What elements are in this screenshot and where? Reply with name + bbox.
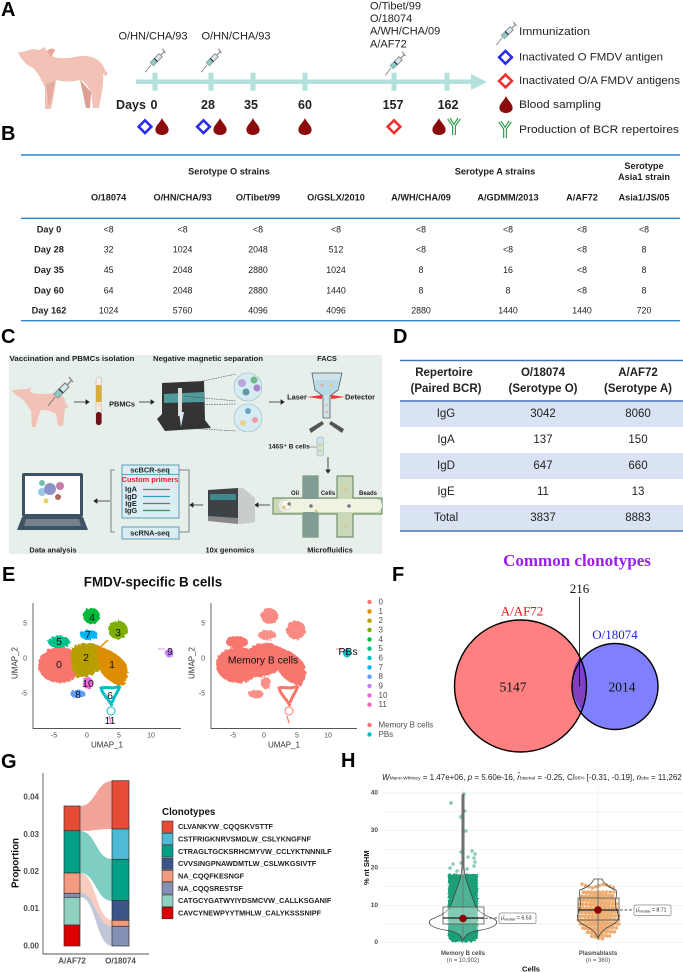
row: Day 162: 720	[637, 306, 651, 316]
right axes: 0	[262, 732, 266, 740]
y axis labels: 10	[371, 902, 378, 909]
x axis labels	[441, 951, 618, 972]
median label: plasmablasts: median	[639, 909, 651, 913]
clonotype legend: NA_CQQFKESNGF	[178, 872, 245, 880]
row: Day 35	[34, 265, 647, 275]
statistics heading: W	[382, 772, 391, 782]
cluster labels: 6	[107, 690, 113, 702]
y axis labels: 30	[371, 827, 378, 834]
cluster labels: 8	[75, 689, 81, 701]
sorted B cell tube: 146S⁺ B cells	[268, 444, 310, 450]
panel letter F: F	[392, 564, 404, 586]
table D header: (Paired BCR)	[411, 383, 482, 395]
row: Day 35: <8	[577, 265, 587, 275]
table header: Asia1 strain	[618, 172, 670, 182]
statistics heading: obs	[641, 775, 649, 781]
legend: clusters: 5	[378, 644, 384, 653]
left axes: 5	[117, 732, 121, 740]
left axes: -5	[21, 690, 27, 698]
statistics heading: [-0.31, -0.19],	[585, 772, 637, 782]
right axes: UMAP_2	[188, 646, 196, 679]
title: FMDV-specific B cells	[84, 574, 222, 590]
axes: 0.00	[23, 942, 40, 950]
panel C: workflow diagram	[1, 326, 382, 554]
row: Day 35: 2048	[173, 265, 192, 275]
table header: A/WH/CHA/09	[391, 193, 451, 203]
y axis labels: 0	[374, 939, 378, 946]
panel letter G: G	[1, 751, 17, 773]
row: Day 28: 512	[329, 244, 343, 254]
workflow background	[9, 355, 382, 554]
table D header: (Serotype O)	[508, 383, 578, 395]
median label: memory B cells: = 6.53	[515, 915, 532, 921]
right axes: 10	[324, 732, 332, 740]
panel F: Venn diagram	[392, 551, 658, 752]
stacked bar O/18074	[112, 781, 129, 946]
FACS sorter: Laser	[287, 392, 307, 402]
legend: clusters: 0	[378, 598, 384, 606]
legend: clusters: 8	[378, 672, 384, 681]
table D rows: IgA	[437, 434, 455, 446]
right axes: UMAP_1	[268, 740, 301, 750]
row: Day 60: 2048	[173, 285, 192, 295]
row: Day 0: <8	[639, 224, 649, 234]
scBCR-seq box: IgE	[125, 499, 137, 508]
row: Day 60: 64	[104, 285, 114, 295]
table D header: A/AF72	[618, 367, 658, 379]
row: Day 162: 4096	[326, 306, 346, 316]
axes: 0.04	[23, 792, 40, 802]
axes: A/AF72	[58, 956, 86, 966]
row: Day 28	[34, 244, 647, 254]
statistics heading: = 1.47e+06,	[420, 772, 468, 782]
row: Day 0: <8	[416, 224, 426, 234]
median label: plasmablasts: = 8.71	[650, 907, 667, 913]
x axis labels: (n = 360)	[586, 958, 610, 964]
row: Day 60: 8	[506, 285, 511, 295]
legend: cell types	[367, 720, 433, 739]
Venn labels: 216	[570, 581, 590, 596]
x axis labels: Memory B cells	[441, 951, 486, 957]
scBCR-seq box: IgG	[125, 506, 137, 515]
row: Day 162: 4096	[248, 306, 268, 316]
jitter: memory B cells	[448, 792, 478, 942]
row: Day 162	[32, 306, 651, 316]
row: Day 0: Day 0	[37, 224, 61, 234]
legend: clusters: 6	[378, 654, 384, 662]
clonotype legend: Clonotypes	[162, 807, 216, 818]
table header: Asia1/JS/05	[618, 193, 670, 203]
row: Day 35: 1024	[326, 265, 346, 275]
row: Day 35: Day 35	[34, 265, 64, 275]
cluster labels: 0	[56, 659, 62, 671]
right axes: 0	[201, 656, 205, 662]
legend: clusters: 2	[378, 616, 384, 625]
statistics heading: 95%	[575, 775, 585, 781]
step titles: Vaccination and PBMCs isolation	[10, 354, 135, 363]
left axes: UMAP_1	[91, 740, 124, 750]
strain labels: O/Tibet/99	[370, 1, 421, 13]
row: Day 60: 8	[642, 285, 647, 295]
FACS sorter	[287, 373, 375, 433]
panel letter E: E	[2, 564, 15, 586]
Venn labels: 2014	[608, 680, 636, 694]
row: Day 60: 8	[419, 285, 424, 295]
row: Day 162: 1440	[498, 306, 518, 316]
row: Day 60	[34, 285, 647, 295]
median label: plasmablasts: μ̂	[636, 907, 639, 913]
axes	[10, 773, 149, 966]
legend A: Inactivated O/A FMDV antigens	[519, 75, 681, 87]
Venn labels: O/18074	[592, 627, 638, 642]
table D rows	[434, 408, 651, 524]
legend: clusters: 10	[378, 691, 388, 700]
icon: pig with syringe	[12, 377, 73, 427]
median label: plasmablasts	[634, 905, 671, 916]
table rules	[21, 155, 680, 321]
cluster labels: 11	[105, 715, 116, 727]
axes: O/18074	[105, 956, 136, 966]
scBCR-seq box: scBCR-seq	[130, 466, 170, 474]
legend: cell types: PBs	[378, 730, 393, 739]
day labels: 0	[151, 98, 158, 112]
legend: clusters	[367, 598, 388, 709]
day labels: 35	[244, 98, 258, 112]
axes: Proportion	[10, 838, 22, 888]
cluster labels: 4	[89, 612, 95, 624]
microfluidics chip	[273, 476, 382, 537]
panel G: alluvial plot	[1, 751, 332, 966]
row: Day 28: <8	[416, 244, 426, 254]
table D rows: 8883	[625, 512, 651, 524]
table D rows: 3042	[530, 408, 556, 420]
scBCR-seq box: Custom primers	[122, 475, 178, 484]
magnified cell circles	[234, 373, 262, 432]
gridlines	[383, 787, 683, 948]
row: Day 35: 16	[503, 265, 513, 275]
timeline arrow	[136, 73, 487, 91]
clonotype legend: NA_CQQSRESTSF	[178, 884, 243, 893]
table D header	[411, 367, 672, 395]
cluster labels: 5	[56, 636, 62, 648]
Venn circles	[454, 620, 658, 752]
process arrows	[74, 400, 330, 507]
legend A: Production of BCR repertoires	[519, 124, 680, 136]
clonotype legend: CAVCYNEWPYYTMHLW_CALYKSSSNIPF	[178, 908, 322, 918]
table D rows: 660	[628, 460, 648, 472]
table header: O/HN/CHA/93	[153, 193, 212, 203]
row: Day 0: <8	[331, 224, 341, 234]
UMAP by cluster	[38, 608, 173, 723]
row: Day 28: <8	[503, 244, 513, 254]
left axes: -5	[51, 732, 57, 740]
table header: O/GSLX/2010	[307, 193, 365, 203]
clonotype legend: CTRAGLTGCKSRHCMYVW_CCLYKTNNNILF	[178, 847, 332, 856]
labels Memory B cells: Memory B cells	[228, 656, 298, 666]
table D rows: 3837	[530, 512, 556, 524]
clonotype legend: CVVSINGPNAWDMTLW_CSLWKGSIVTF	[178, 859, 317, 868]
table bands	[400, 401, 683, 531]
day labels	[116, 98, 458, 112]
table D rows: IgD	[437, 460, 455, 472]
scRNA-seq box: scRNA-seq	[130, 528, 170, 538]
sorted B cell tube	[268, 437, 324, 456]
right axes: -5	[199, 690, 205, 698]
label PBMCs: PBMCs	[109, 400, 135, 408]
stacked bar A/AF72	[64, 806, 80, 946]
statistics heading: n	[637, 772, 642, 782]
day labels: 162	[438, 98, 458, 112]
row: Day 0: <8	[178, 224, 188, 234]
row: Day 60: Day 60	[34, 285, 64, 295]
step titles: Microfluidics	[307, 546, 353, 554]
right axes: 5	[201, 620, 205, 628]
jitter: plasmablasts	[578, 884, 620, 939]
median label: memory B cells: μ̂	[501, 915, 504, 921]
statistics heading: biserial	[520, 775, 535, 781]
right axes: -5	[230, 732, 236, 740]
row: Day 60: <8	[577, 285, 587, 295]
cluster labels: 3	[115, 627, 121, 639]
table D rows: 647	[533, 460, 553, 472]
step titles	[10, 354, 353, 554]
cluster labels	[56, 612, 173, 727]
legend A: Immunization	[519, 26, 590, 38]
step titles: 10x genomics	[206, 546, 254, 554]
table D rows: 11	[537, 486, 549, 498]
table header: O/Tibet/99	[236, 193, 280, 203]
table header	[91, 161, 670, 203]
panel B: neutralizing titer table	[1, 123, 680, 321]
axes: 0.02	[23, 867, 40, 876]
label PBs: PBs	[338, 646, 358, 658]
table header: A/GDMM/2013	[477, 193, 539, 203]
overlap leader line	[578, 597, 580, 686]
scRNA-seq box	[122, 527, 179, 539]
strain labels: O/18074	[370, 13, 412, 25]
row: Day 28: <8	[577, 244, 587, 254]
y axis labels: 40	[371, 790, 378, 796]
y axis labels	[362, 790, 378, 946]
icon: blood tube	[96, 377, 102, 425]
table D rows: Total	[434, 512, 458, 524]
clonotype legend: CLVANKYW_CQQSKVSTTF	[178, 822, 274, 831]
scBCR-seq box: IgA	[125, 484, 138, 494]
panel letter B: B	[1, 123, 15, 145]
Venn labels	[500, 581, 638, 694]
row: Day 0: <8	[104, 224, 114, 234]
y axis labels: 20	[371, 864, 378, 872]
cluster labels: 2	[83, 652, 89, 664]
left axes: 0	[23, 656, 27, 662]
legend: cell types: Memory B cells	[378, 720, 433, 730]
day labels: Days	[116, 98, 146, 112]
left axes: 0	[85, 732, 89, 740]
row: Day 28: 2048	[248, 244, 268, 254]
x axis labels: (n = 10,902)	[447, 958, 479, 964]
strain labels	[118, 1, 440, 50]
panel D: repertoire table	[393, 326, 683, 531]
row: Day 35: 8	[419, 265, 424, 275]
legend A: Blood sampling	[519, 99, 601, 111]
table D header: (Serotype A)	[604, 383, 672, 395]
magnetic separator	[157, 374, 236, 431]
clonotype legend: CATGCYGATWYIYDSMCVW_CALLKSGANIF	[178, 896, 332, 905]
scBCR-seq box: IgD	[125, 492, 138, 501]
table D rows: 150	[628, 434, 648, 446]
table rules	[400, 360, 683, 531]
Venn labels: A/AF72	[501, 604, 543, 618]
violin and box: plasmablasts	[578, 879, 634, 939]
cluster labels: 7	[85, 629, 91, 641]
table D header: Repertoire	[415, 367, 473, 379]
y axis labels: % nt SHM	[362, 850, 371, 885]
legend: clusters: 4	[378, 635, 384, 644]
table D rows: IgE	[437, 486, 455, 498]
strain labels: O/HN/CHA/93	[201, 31, 271, 43]
right axes	[188, 603, 357, 750]
row: Day 60: 1440	[326, 285, 346, 295]
UMAP by cell type	[216, 608, 351, 723]
x axis labels: Plasmablasts	[579, 951, 618, 957]
panel H: SHM violin plot	[341, 750, 683, 972]
table header: Serotype O strains	[188, 167, 270, 177]
legend: clusters: 3	[378, 626, 384, 634]
title: Common clonotypes	[503, 551, 651, 570]
legend A	[496, 22, 681, 138]
table D rows: IgG	[437, 408, 455, 420]
panel letter D: D	[393, 326, 407, 348]
row: Day 0	[37, 224, 649, 234]
legend: clusters: 7	[378, 663, 384, 672]
microfluidics chip: Oil	[291, 491, 299, 497]
panel A: immunization timeline	[1, 0, 681, 138]
strain labels: A/WH/CHA/09	[370, 26, 440, 38]
row: Day 0: <8	[577, 224, 587, 234]
legend A: Inactivated O FMDV antigen	[519, 51, 663, 63]
cluster labels: 1	[109, 659, 115, 671]
table header: O/18074	[91, 193, 127, 203]
cluster labels: 9	[167, 646, 173, 658]
table D rows: 13	[632, 486, 644, 498]
median label: memory B cells: median	[504, 917, 516, 921]
step titles: Data analysis	[29, 546, 77, 554]
brackets	[111, 470, 189, 532]
legend: clusters: 1	[378, 607, 384, 616]
statistics heading: = 11,262	[649, 772, 682, 782]
day labels: 60	[298, 98, 312, 112]
panel E: UMAP plots	[2, 564, 433, 750]
table header: Serotype A strains	[455, 167, 535, 177]
Venn labels: 5147	[500, 680, 527, 694]
legend: clusters: 9	[378, 682, 384, 690]
clonotype legend: CSTFRIGKNRVSMDLW_CSLYKNGFNF	[178, 834, 312, 844]
row: Day 28: 8	[642, 244, 647, 254]
panel letter C: C	[1, 326, 15, 348]
row: Day 162: 5760	[173, 306, 192, 316]
table header: Serotype	[624, 161, 664, 171]
median label: memory B cells	[499, 913, 536, 924]
row: Day 0: <8	[253, 224, 263, 234]
day labels: 157	[383, 98, 403, 112]
step titles: FACS	[317, 354, 337, 363]
icon: laptop with UMAP	[17, 473, 88, 530]
alluvial flows	[80, 781, 112, 946]
icons: syringes on timeline	[145, 49, 405, 75]
row: Day 0: <8	[503, 224, 513, 234]
10x genomics machine	[208, 488, 255, 524]
row: Day 35: 8	[642, 265, 647, 275]
left axes: 10	[147, 732, 155, 740]
left axes	[10, 603, 181, 750]
table D header: O/18074	[521, 367, 566, 379]
row: Day 162: 1024	[99, 306, 118, 316]
scBCR-seq box	[122, 465, 179, 518]
row: Day 60: 2880	[248, 285, 268, 295]
row: Day 35: 45	[104, 265, 114, 275]
strain labels: O/HN/CHA/93	[118, 31, 188, 43]
panel letter H: H	[341, 750, 355, 772]
axes: 0.03	[23, 830, 40, 839]
statistics heading: Mann-Whitney	[390, 775, 421, 781]
table D rows: 8060	[625, 408, 651, 420]
microfluidics chip: Beads	[359, 491, 378, 497]
right axes: 5	[295, 732, 299, 740]
microfluidics chip: Cells	[321, 491, 336, 497]
left axes: 5	[23, 620, 27, 628]
statistics heading: p = 5.60e-16, r̂	[468, 772, 520, 782]
row: Day 28: Day 28	[34, 244, 64, 254]
day labels: 28	[201, 98, 215, 112]
row: Day 28: 32	[104, 244, 114, 254]
violin and box: memory B cells	[429, 793, 499, 942]
row: Day 35: 2880	[248, 265, 268, 275]
row: Day 162: Day 162	[32, 306, 66, 316]
clonotype legend	[162, 807, 332, 919]
left axes: UMAP_2	[10, 646, 20, 679]
FACS sorter: Detector	[345, 392, 375, 402]
cluster labels: 10	[82, 678, 94, 690]
row: Day 162: 1440	[572, 306, 592, 316]
row: Day 162: 2880	[411, 306, 431, 316]
statistics heading: = -0.25, CI	[535, 772, 575, 782]
table header: A/AF72	[566, 193, 598, 203]
icon: pig	[18, 47, 108, 109]
table D rows: 137	[533, 434, 553, 446]
legend: clusters: 11	[378, 700, 387, 709]
step titles: Negative magnetic separation	[153, 354, 263, 363]
row: Day 28: 1024	[173, 244, 192, 254]
event icons under timeline	[139, 118, 460, 135]
axes: 0.01	[23, 904, 40, 913]
strain labels: A/AF72	[370, 38, 407, 50]
